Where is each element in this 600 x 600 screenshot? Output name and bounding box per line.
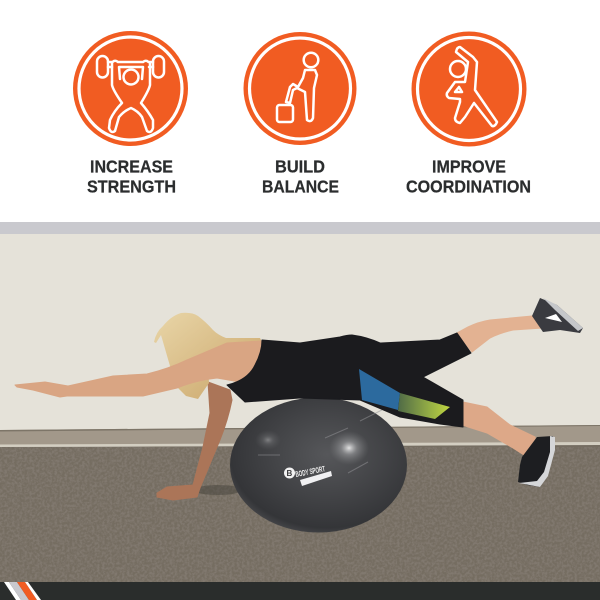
ball logo: BODY SPORT: [295, 464, 326, 479]
lower calf: [462, 402, 537, 457]
label: improve coordination: IMPROVE: [432, 157, 506, 177]
label: increase strength: [87, 157, 176, 196]
body and tights: [227, 333, 471, 427]
carpet: [0, 445, 600, 582]
divider band: [0, 222, 600, 234]
baseboard: [0, 425, 600, 447]
extended arm and shoulder: [15, 341, 262, 397]
panel: exercise photo: [0, 234, 600, 582]
icon: improve coordination: [412, 32, 526, 146]
hair: [154, 313, 262, 399]
blue stripe: [359, 369, 400, 410]
raised shoe: [532, 298, 583, 333]
shadow under hand: [194, 485, 242, 495]
exercise ball: [230, 398, 407, 532]
label: improve coordination: [406, 157, 531, 196]
raised calf: [457, 316, 543, 352]
icon: increase strength: [73, 31, 188, 146]
green stripe: [398, 393, 450, 419]
label: increase strength: STRENGTH: [87, 176, 176, 196]
wall: [0, 234, 600, 432]
ball logo: B: [286, 469, 292, 478]
ball logo: [284, 464, 332, 486]
footer bar: [0, 582, 600, 600]
woman: [15, 298, 583, 500]
icon: build balance: [244, 32, 356, 145]
supporting arm: [157, 382, 232, 500]
label: improve coordination: COORDINATION: [406, 176, 531, 196]
label: build balance: [262, 157, 339, 196]
panel: benefits row: [73, 31, 531, 196]
label: build balance: BUILD: [275, 157, 325, 177]
footer stripes: [4, 582, 41, 600]
label: increase strength: INCREASE: [90, 157, 173, 177]
lower shoe: [518, 436, 555, 487]
label: build balance: BALANCE: [262, 176, 339, 196]
